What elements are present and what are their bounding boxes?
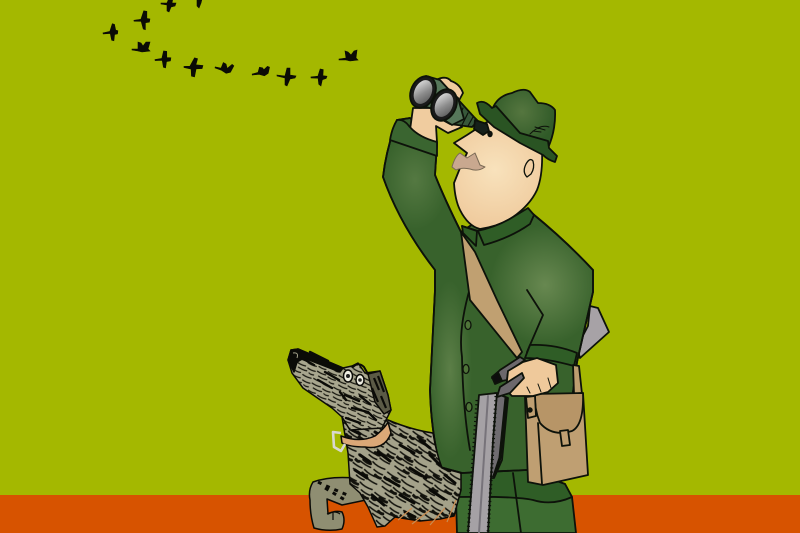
bird 5 bbox=[132, 42, 150, 52]
dog collar bbox=[341, 422, 391, 447]
moustache bbox=[452, 153, 485, 170]
hat brim bbox=[477, 102, 557, 162]
binoculars bbox=[405, 72, 489, 135]
coat cuff raised bbox=[390, 120, 437, 156]
trouser belt bbox=[456, 470, 572, 502]
dog raised paw bbox=[309, 478, 366, 530]
bag strap bbox=[573, 365, 582, 394]
trousers bbox=[456, 470, 576, 533]
bag flap bbox=[535, 393, 583, 433]
bag clasp bbox=[560, 430, 570, 446]
bird 7 bbox=[184, 57, 204, 77]
back lens bbox=[405, 72, 441, 112]
dog snout dark top bbox=[288, 349, 343, 372]
hat feather bbox=[530, 126, 549, 134]
bird 9 bbox=[252, 66, 270, 77]
hat crown bbox=[492, 90, 555, 148]
bird 1 bbox=[102, 23, 120, 43]
gun action bbox=[492, 357, 525, 382]
bird 12 bbox=[339, 50, 358, 61]
eye bbox=[488, 132, 492, 136]
dog head bbox=[288, 349, 391, 430]
coat with sleeve bbox=[381, 118, 600, 473]
raised hand bbox=[410, 108, 462, 142]
dog ear bbox=[368, 371, 391, 414]
flock of birds bbox=[102, 0, 358, 87]
dog bbox=[288, 349, 461, 530]
bird 3 bbox=[161, 0, 176, 12]
gun barrels bbox=[468, 393, 508, 533]
dog collar ring bbox=[333, 432, 345, 451]
ground: orange band bbox=[0, 495, 800, 533]
front lens bbox=[426, 85, 462, 125]
gripping hand bbox=[506, 358, 558, 396]
bird 10 bbox=[277, 68, 296, 86]
eyepiece bbox=[474, 120, 489, 135]
dog extra fur strokes bbox=[352, 430, 455, 517]
gun lever bbox=[497, 373, 524, 397]
ear bbox=[524, 160, 534, 177]
gun stock bbox=[577, 306, 609, 358]
back barrel bbox=[418, 76, 451, 110]
front barrel bbox=[438, 90, 464, 125]
bird 6 bbox=[154, 50, 172, 69]
dog body bbox=[342, 417, 461, 527]
bird 11 bbox=[310, 68, 328, 87]
binocular taper bbox=[437, 94, 478, 127]
lower barrel bbox=[488, 393, 508, 478]
coat buttons bbox=[463, 320, 472, 412]
bird 4 bbox=[197, 0, 202, 8]
dog eyes bbox=[344, 370, 364, 386]
dog head dark fur bbox=[300, 352, 376, 423]
dog brow bbox=[352, 364, 368, 374]
right sleeve fold bbox=[527, 290, 543, 352]
shoulder strap bbox=[461, 232, 522, 358]
upper barrel bbox=[468, 393, 497, 533]
right cuff bbox=[525, 345, 577, 366]
head and face bbox=[454, 120, 542, 229]
bag buckle tab bbox=[526, 396, 536, 418]
shoulder bag bbox=[525, 393, 588, 485]
hunter bbox=[381, 72, 609, 533]
bird 8 bbox=[214, 61, 234, 75]
collar bbox=[462, 208, 534, 245]
bird 2 bbox=[133, 10, 151, 31]
dog paw toes bbox=[327, 512, 340, 520]
coat placket line bbox=[461, 288, 470, 450]
dog tail fringe bbox=[398, 500, 456, 525]
